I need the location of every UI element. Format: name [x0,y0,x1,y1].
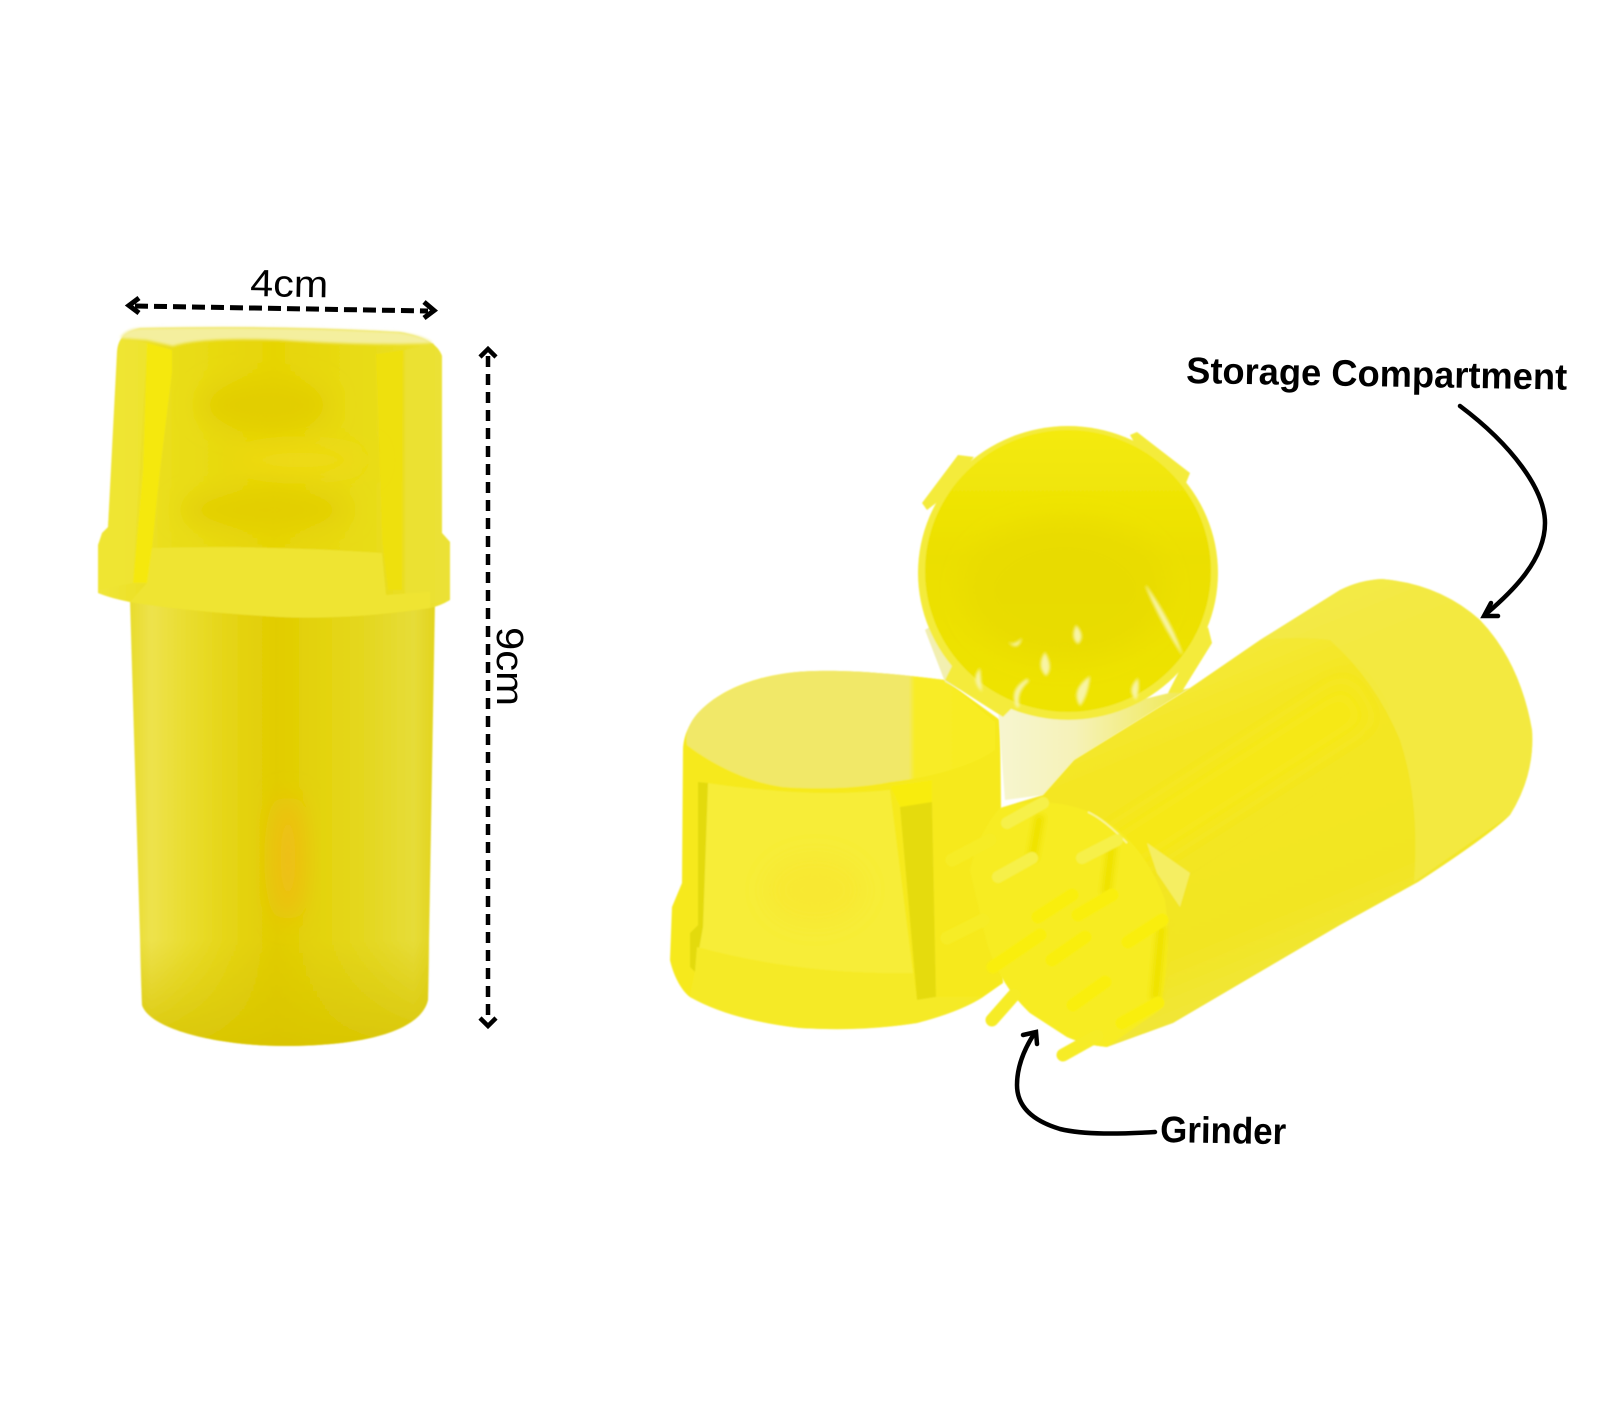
lid outline [670,671,1003,1029]
closed grinder lid [98,327,450,618]
grinder plate [970,802,1168,1047]
lid left slot [133,343,172,583]
lid front warm glow [765,855,865,925]
grinder plate white edge [1088,812,1127,843]
product: closed grinder front view [98,327,450,1046]
grinder teeth inside plate [993,895,1162,1023]
lid right slot [376,350,403,590]
label: 9cm: 9cm [488,627,530,706]
product: open cup seen from above [918,426,1218,800]
label: Grinder: Grinder [1160,1109,1287,1152]
cup interior [925,430,1211,712]
grinder plate tooth shadows [1032,815,1162,1000]
body orange glow [272,796,304,920]
lid collar band [130,547,430,618]
label: 4cm: 4cm [250,263,329,306]
tilted grinder body [970,579,1532,1047]
lid shading blobs [200,379,330,431]
grinder teeth pale [998,803,1117,877]
lid right slot upper [890,780,932,807]
lid right slot [900,802,936,1000]
dimension: height arrow [480,349,496,1026]
grinder locking tab [1147,843,1190,907]
arrow: storage compartment [1460,406,1545,616]
tilted grinder cap tint [1260,579,1532,882]
product: separated lid [670,671,1003,1029]
lid bottom band [690,947,983,1029]
lid right shoulder [405,343,450,608]
cup rim with tabs [918,426,1218,720]
cup inner grinding holes [975,586,1182,707]
lid front face [697,783,913,973]
closed grinder storage body [130,600,435,1046]
dimension: width arrow [129,298,434,318]
lid left slot [690,782,708,972]
product: tilted grinder showing teeth [947,579,1532,1055]
cup inner floor shade [965,520,1165,660]
tilted grinder body shine [1110,700,1360,860]
lid left shoulder [98,340,147,590]
label: Storage Compartment: Storage Compartment [1186,350,1568,398]
grinder teeth outside silhouette [947,840,1097,1055]
lid top highlight [120,327,433,346]
body lower shading [139,940,430,1046]
lid top face [687,671,995,788]
pale cup wall below rim [998,688,1190,800]
arrow: grinder [1017,1032,1155,1134]
